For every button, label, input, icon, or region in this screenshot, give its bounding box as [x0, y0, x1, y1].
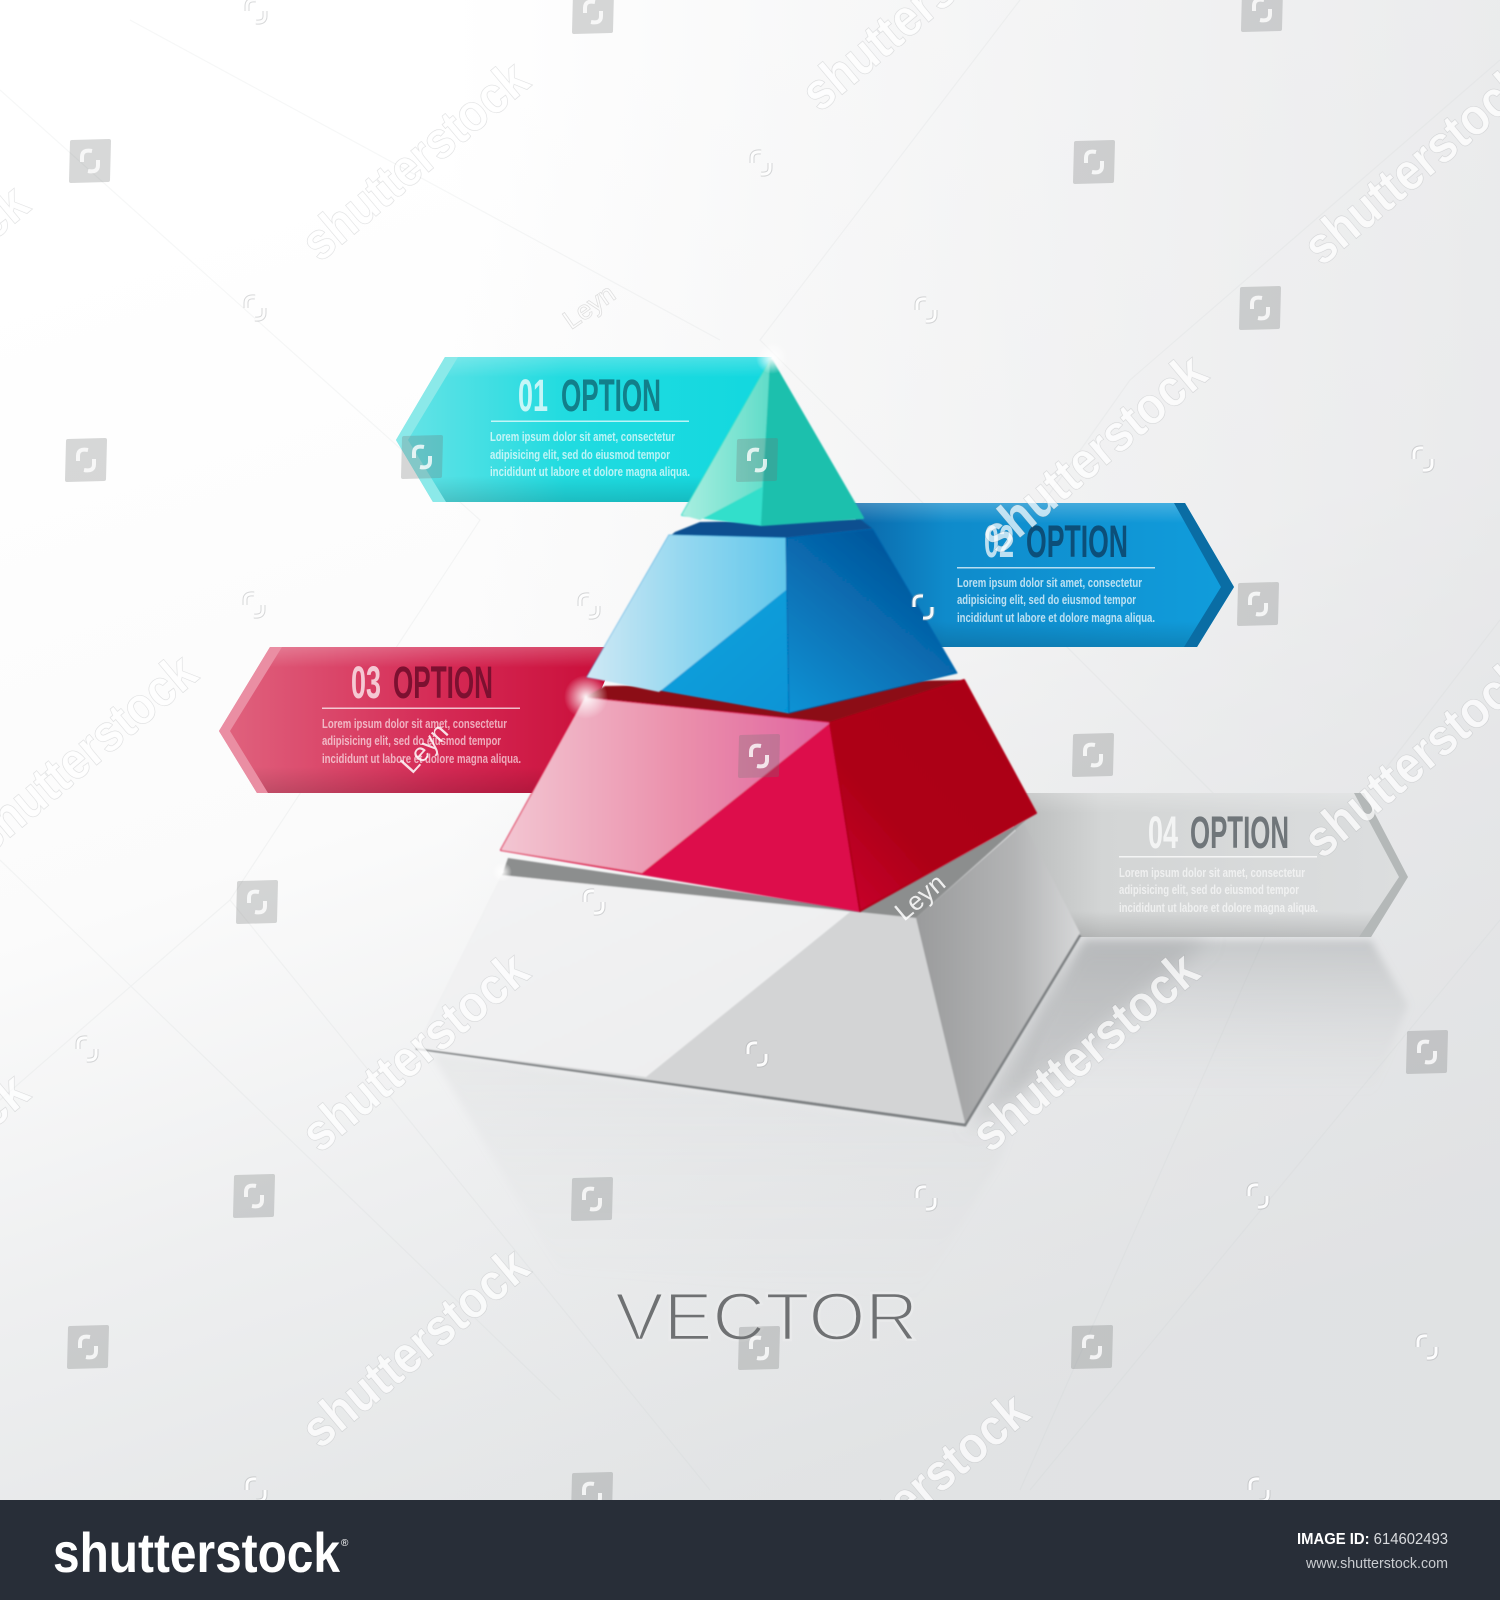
watermark text: shutterstock [290, 50, 540, 272]
text 02: Lorem ipsum dolor sit amet, consectetur [957, 575, 1142, 590]
banner 01 chevron edge [396, 357, 458, 502]
heading 01: 01 [518, 370, 548, 421]
heading 02: 02 [984, 516, 1014, 567]
author watermarks: Leyn [557, 278, 621, 335]
heading 03: 03 [351, 657, 381, 708]
text 01: incididunt ut labore et dolore magna aliqua. [490, 464, 690, 479]
option 02 banner [850, 503, 1234, 647]
text 01: Lorem ipsum dolor sit amet, consectetur [490, 429, 675, 444]
pyramid tier 3: red [501, 680, 1036, 911]
registered mark: ® [341, 1538, 349, 1549]
heading 01: OPTION [561, 370, 661, 421]
option 01 banner [396, 357, 772, 502]
text 01: adipisicing elit, sed do eiusmod tempor [490, 447, 670, 462]
heading 04 [1148, 807, 1289, 858]
blue left face highlight [587, 535, 786, 692]
banner 02 chevron edge [1174, 503, 1234, 647]
watermark text: shutterstock [960, 941, 1210, 1163]
author watermarks: Leyn [394, 717, 454, 779]
gray right face [916, 823, 1080, 1123]
watermark text: shutterstock [290, 1237, 540, 1459]
text 03: incididunt ut labore et dolore magna aliqua. [322, 751, 521, 766]
watermark text: shutterstock [290, 941, 540, 1163]
glints [492, 342, 788, 882]
reflections on floor [430, 938, 1408, 1300]
author watermarks [394, 278, 951, 927]
text 02 [957, 575, 1155, 625]
banner 04 chevron edge [1354, 793, 1408, 937]
text 04: Lorem ipsum dolor sit amet, consectetur [1119, 865, 1305, 880]
teal left face highlight [682, 359, 771, 520]
text 03: adipisicing elit, sed do eiusmod tempor [322, 733, 501, 748]
gray top shadow [502, 820, 1026, 918]
vector label: VECTOR [615, 1279, 918, 1355]
text 01 [490, 429, 690, 479]
image id: IMAGE ID: 614602493 [1297, 1531, 1448, 1548]
heading 04: 04 [1148, 807, 1178, 858]
heading 04: OPTION [1190, 807, 1289, 858]
blue right face [786, 529, 957, 713]
heading 02: OPTION [1026, 516, 1128, 567]
pyramid tier 4: gray base [416, 820, 1080, 1125]
red right face [830, 680, 1036, 911]
watermark text: shutterstock [790, 1382, 1040, 1600]
text 03: Lorem ipsum dolor sit amet, consectetur [322, 716, 507, 731]
pyramid tier 2: blue [587, 519, 957, 713]
gray left face highlight [416, 875, 850, 1077]
banner 03 chevron edge [219, 647, 282, 793]
text 02: adipisicing elit, sed do eiusmod tempor [957, 592, 1136, 607]
option 03 banner [219, 647, 620, 793]
text 03 [322, 716, 521, 766]
heading 03 [351, 657, 493, 708]
footer bar [0, 1500, 1500, 1600]
teal right face [762, 359, 863, 525]
pyramid tier 1: teal apex [682, 359, 863, 525]
heading 03: OPTION [393, 657, 493, 708]
option 04 banner [1000, 793, 1408, 937]
red left face highlight [501, 698, 830, 873]
text 02: incididunt ut labore et dolore magna aliqua. [957, 610, 1155, 625]
watermark text: shutterstock [968, 343, 1218, 565]
site url: www.shutterstock.com [1305, 1555, 1448, 1572]
text 04 [1119, 865, 1318, 915]
footer logo: shutterstock [53, 1521, 341, 1584]
text 04: adipisicing elit, sed do eiusmod tempor [1119, 882, 1299, 897]
heading 02 [984, 516, 1128, 567]
author watermarks: Leyn [889, 867, 951, 927]
text 04: incididunt ut labore et dolore magna aliqua. [1119, 900, 1318, 915]
heading 01 [518, 370, 661, 421]
